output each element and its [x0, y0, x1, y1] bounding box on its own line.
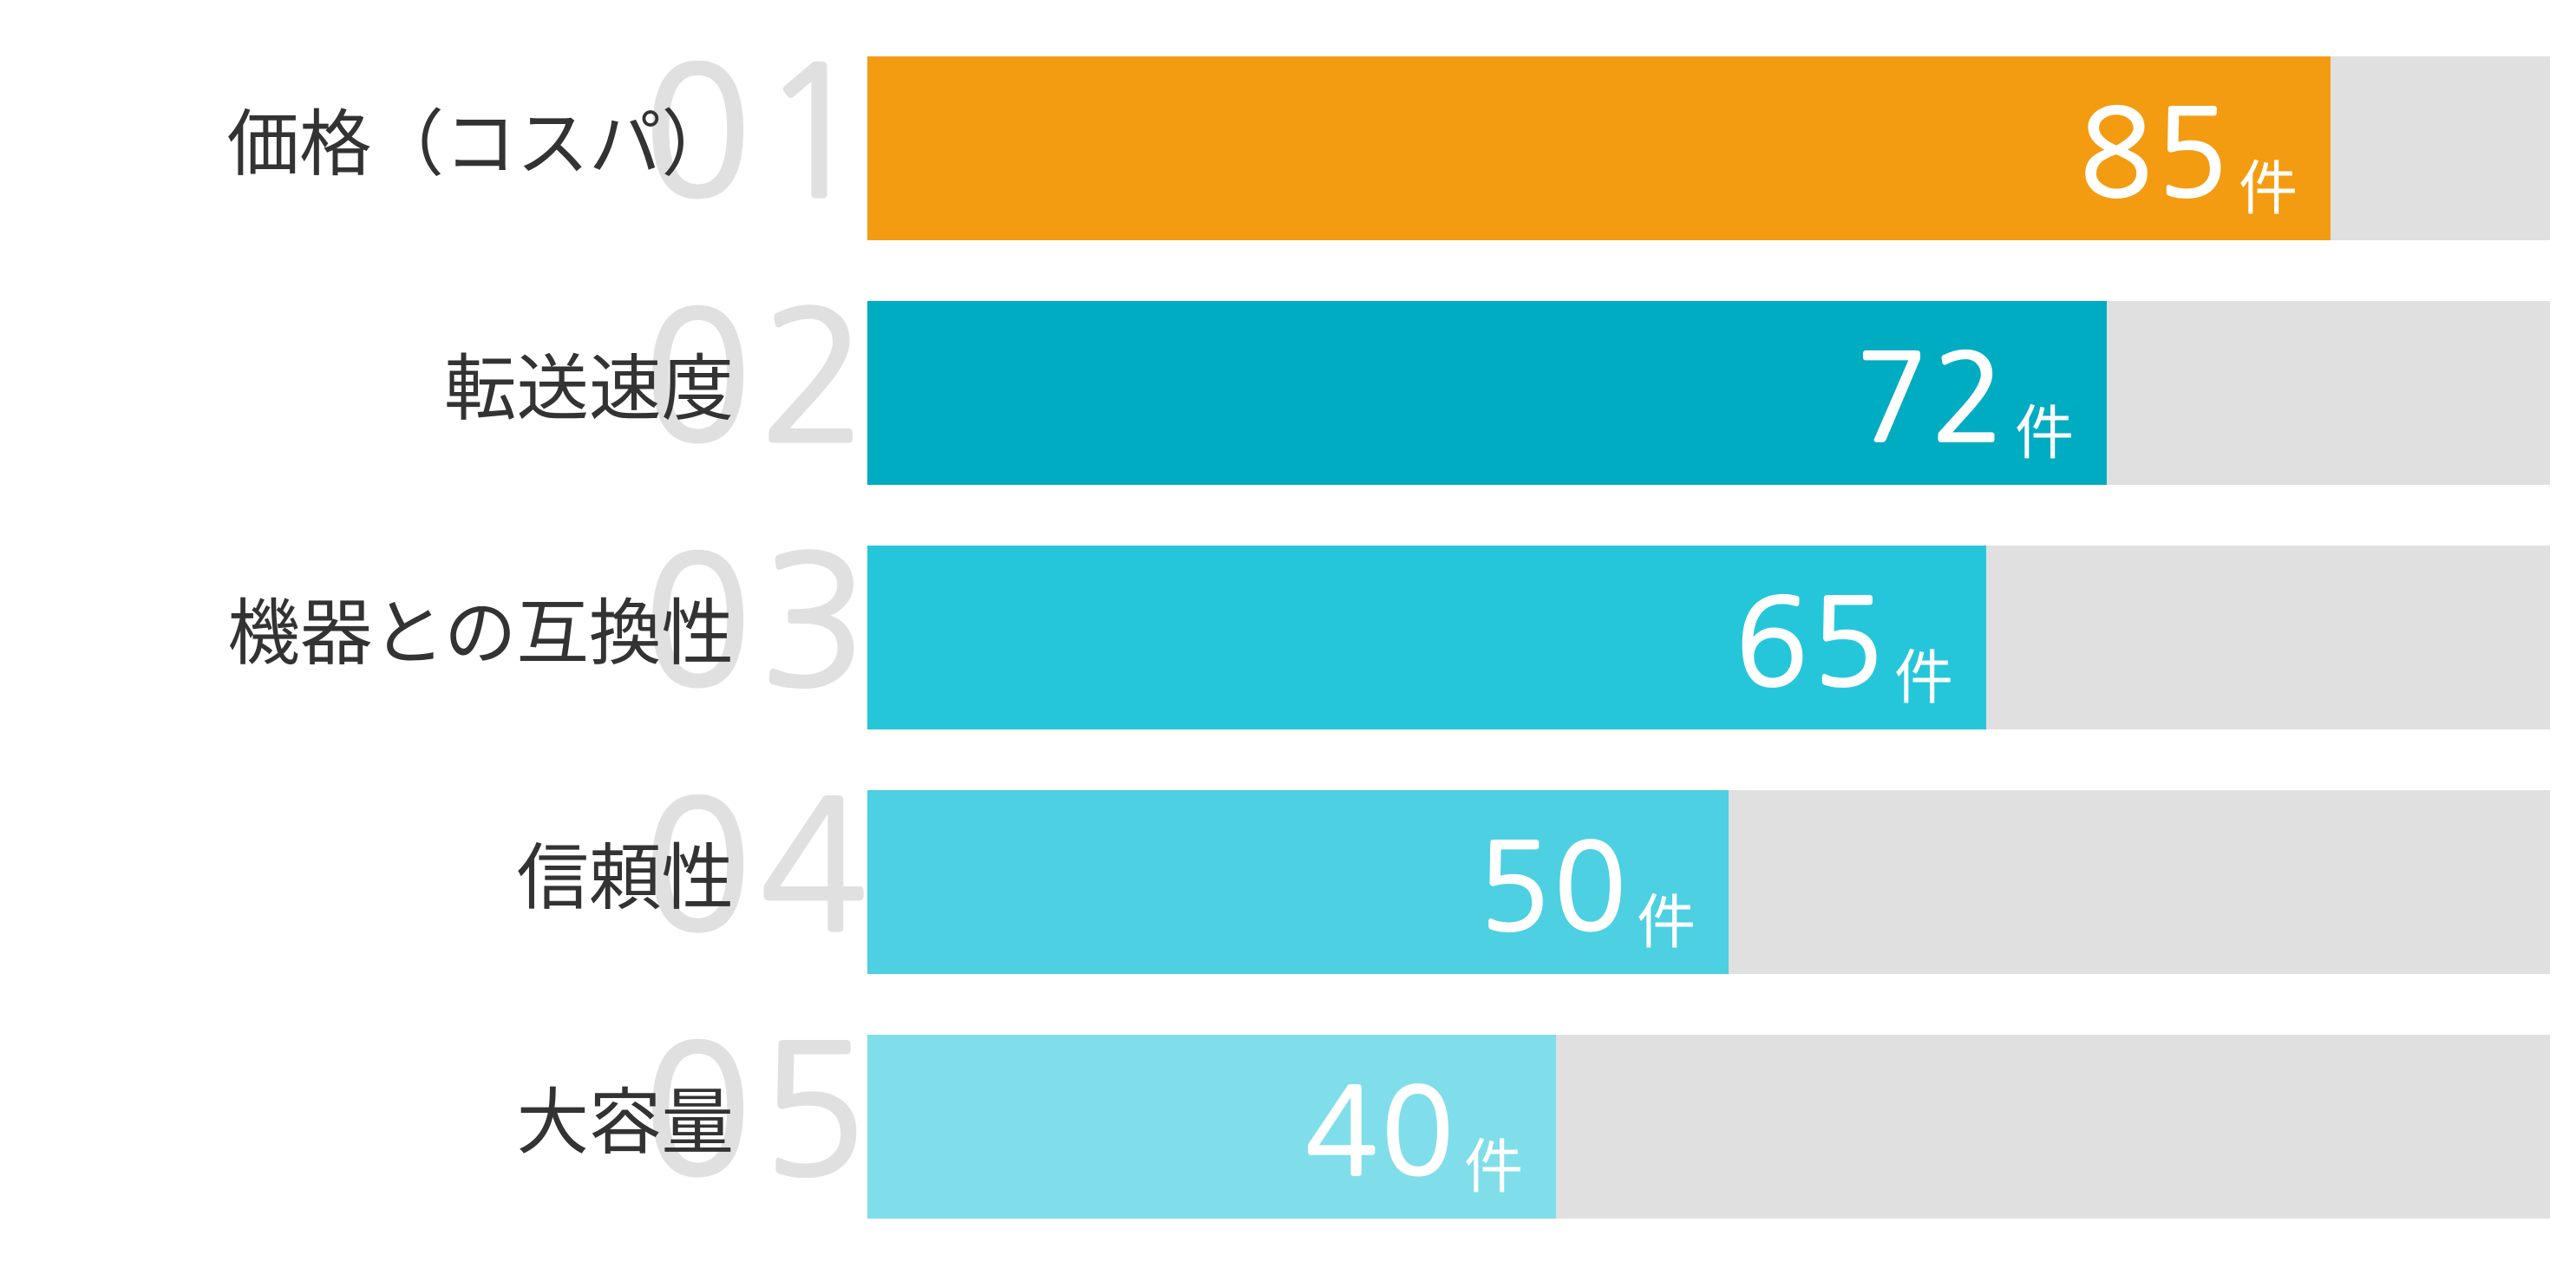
track 1 [867, 56, 2550, 240]
row 1: price [227, 43, 2550, 240]
row 3: compatibility [227, 533, 2550, 729]
value 72: 72 [1856, 338, 2008, 458]
track 5 [867, 1035, 2550, 1219]
row 2: transfer speed [444, 288, 2550, 485]
row 4: reliability [517, 777, 2550, 974]
unit 2: 件 [2015, 385, 2074, 471]
unit 5: 件 [1464, 1119, 1523, 1205]
track 2 [867, 301, 2550, 485]
bar 4 [867, 790, 1729, 974]
label: compatibility: 機器との互換性 [227, 592, 734, 674]
label: transfer speed: 転送速度 [444, 348, 734, 429]
row 5: capacity [517, 1022, 2550, 1219]
value 85: 85 [2080, 94, 2232, 213]
label: capacity: 大容量 [517, 1082, 734, 1163]
rank number 04: 04 [644, 777, 867, 956]
bar 5 [867, 1035, 1556, 1219]
rank number 03: 03 [644, 533, 867, 711]
bar 1 [867, 56, 2331, 240]
value 40: 40 [1305, 1072, 1457, 1192]
bar 2 [867, 301, 2107, 485]
unit 1: 件 [2239, 141, 2298, 226]
rank number 05: 05 [644, 1022, 867, 1200]
unit 3: 件 [1894, 630, 1953, 716]
track 4 [867, 790, 2550, 974]
label: price: 価格（コスパ） [227, 103, 734, 185]
bar 3 [867, 546, 1986, 729]
rank number 02: 02 [644, 288, 867, 467]
label: reliability: 信頼性 [517, 837, 734, 919]
track 3 [867, 546, 2550, 729]
rank number 01: 01 [644, 43, 867, 222]
unit 4: 件 [1637, 874, 1696, 960]
value 50: 50 [1478, 827, 1630, 947]
value 65: 65 [1736, 583, 1887, 703]
